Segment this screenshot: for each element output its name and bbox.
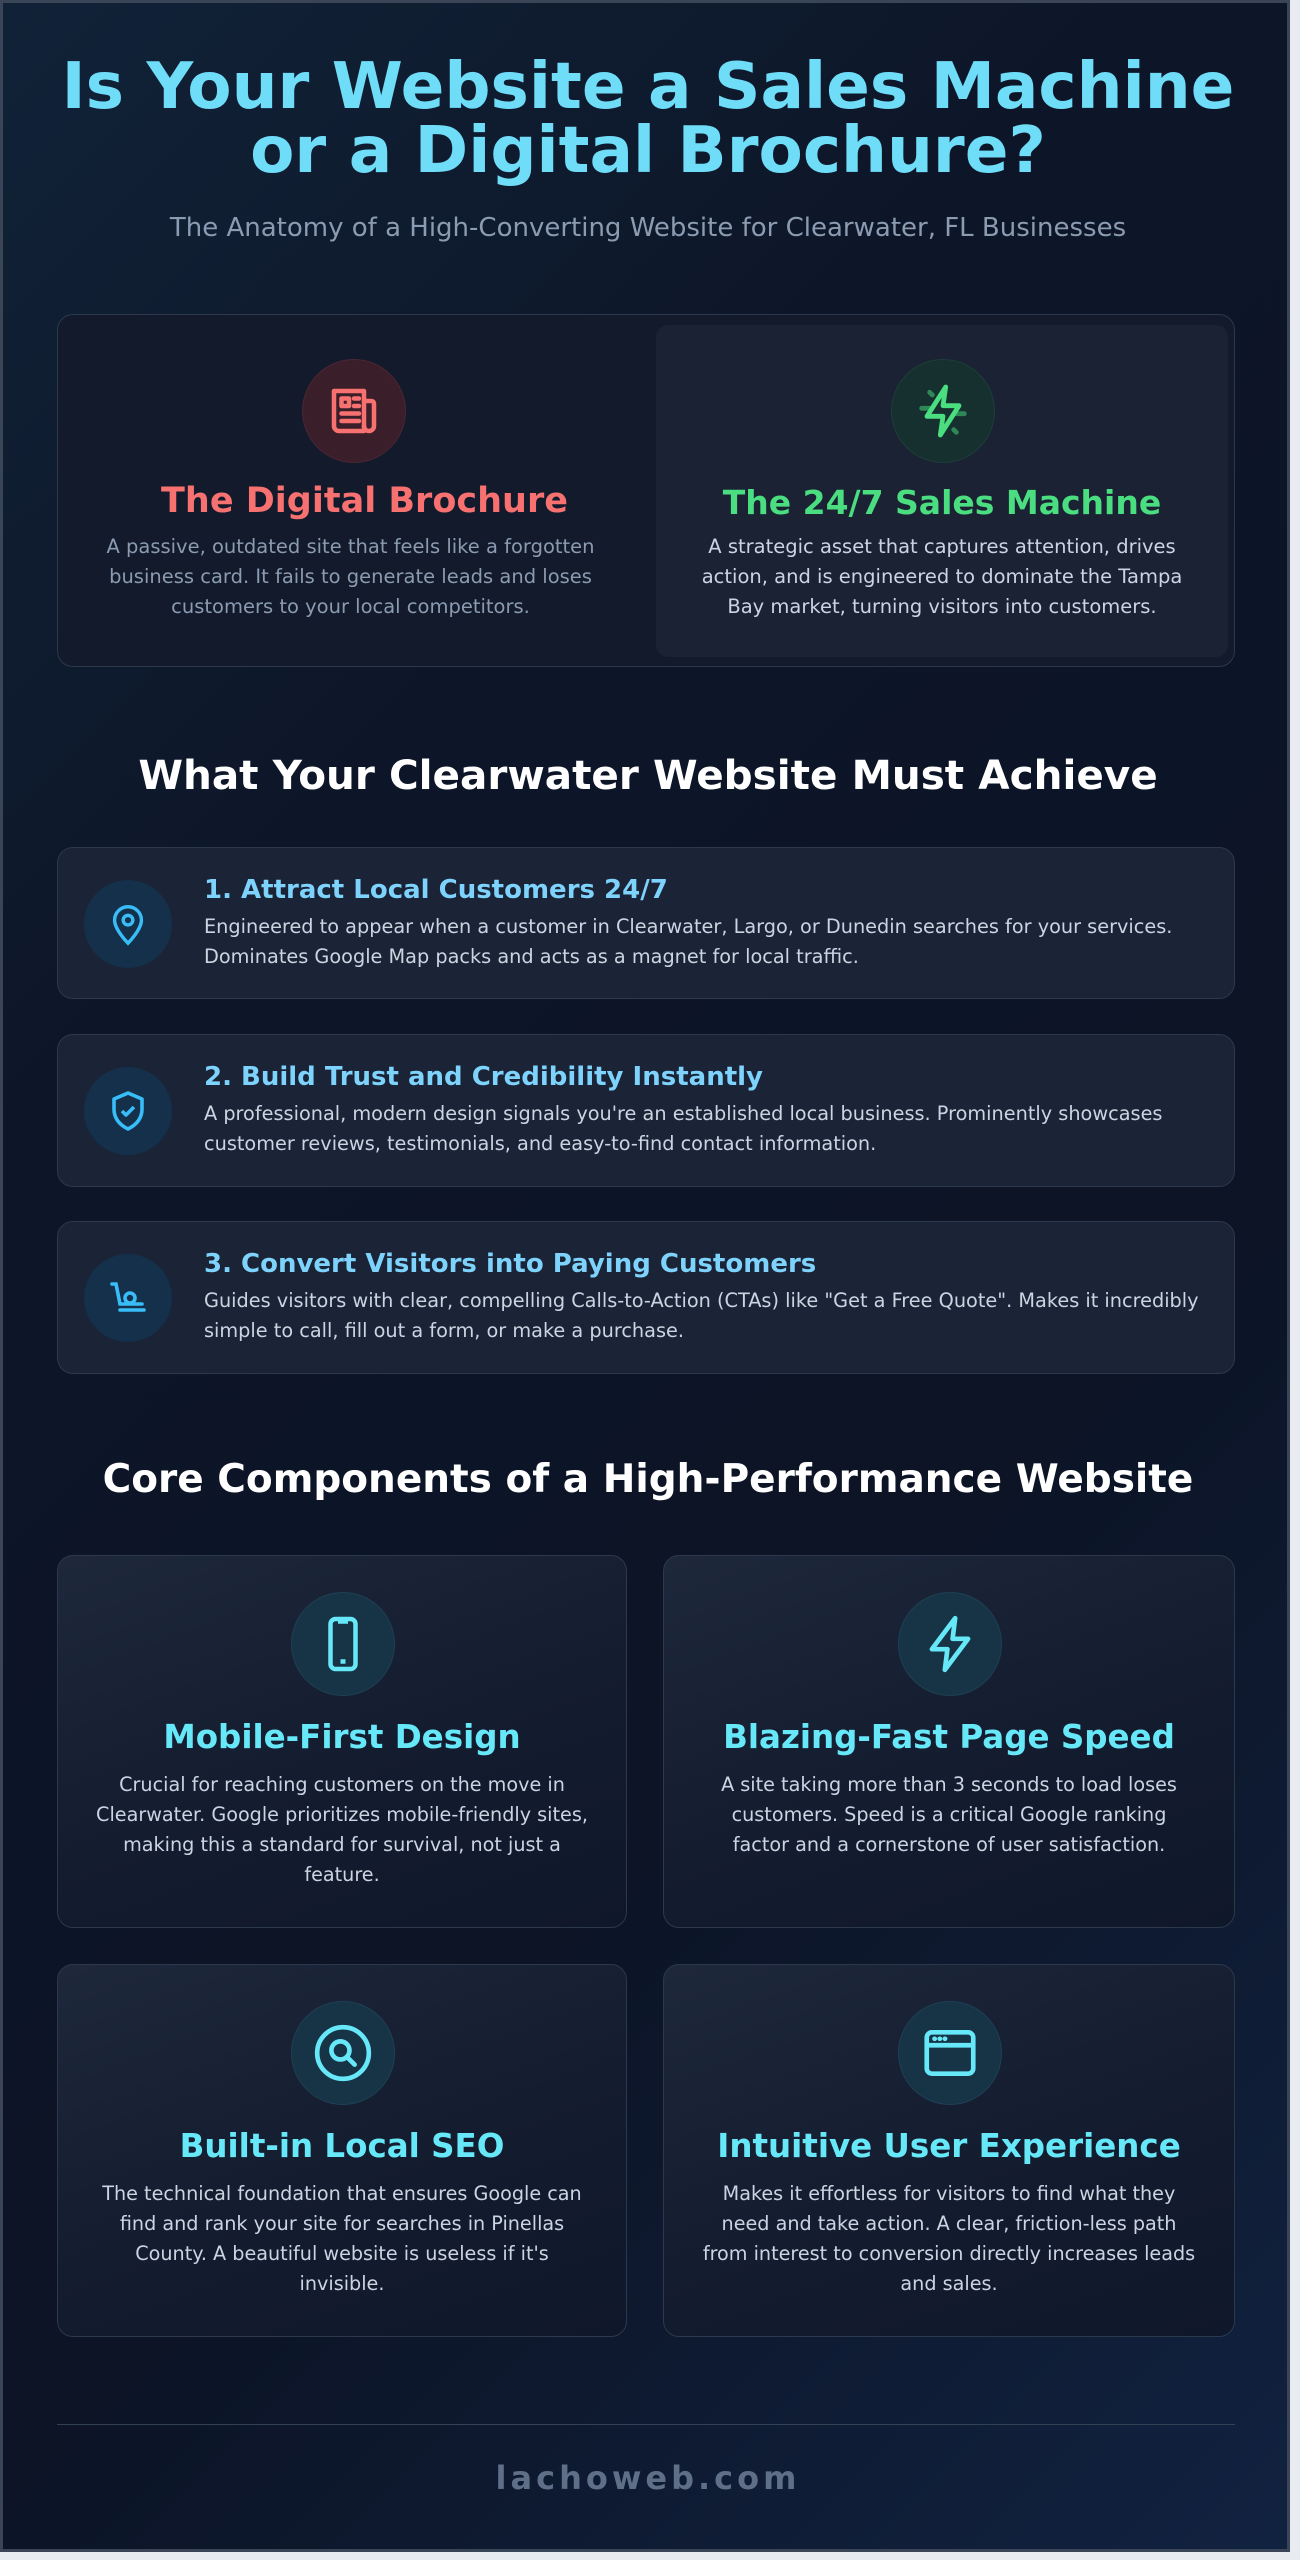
- icon: lightning: [891, 359, 995, 463]
- panel: comparison: [57, 314, 1235, 667]
- panel: fast speed: Blazing-Fast Page Speed: [723, 1718, 1175, 1756]
- panel: local seo: Built-in Local SEO: [180, 2127, 504, 2165]
- panel: digital brochure: [106, 359, 595, 618]
- heading: what your website must achieve: What Your Clearwater Website Must Achieve: [138, 751, 1158, 799]
- panel: mobile-first: [57, 1555, 627, 1928]
- panel: achieve 1: Engineered to appear when a customer in Clearwater, Largo, or Dunedin searches for your services. Dominates Google Map packs and acts as a magnet for local traffic.: [204, 915, 1172, 968]
- panel: mobile-first: Crucial for reaching customers on the move in Clearwater. Google prioritizes mobile-friendly sites, making this a standard for survival, not just a feature.: [96, 1773, 588, 1886]
- panel: achieve 3: Guides visitors with clear, compelling Calls-to-Action (CTAs) like "Get a Free Quote". Makes it incredibly simple to call, fill out a form, or make a purchase.: [204, 1289, 1199, 1342]
- text: sales machine description: A strategic asset that captures attention, drives action, and is engineered to dominate the Tampa Bay market, turning visitors into customers.: [702, 535, 1182, 618]
- title: [62, 49, 1234, 188]
- panel: user experience: [663, 1964, 1235, 2337]
- icon: map pin: [84, 880, 172, 968]
- icon: search: [291, 2001, 395, 2105]
- panel: mobile-first: Mobile-First Design: [163, 1718, 521, 1756]
- icon: newspaper: [302, 359, 406, 463]
- panel: achieve 3: [57, 1221, 1235, 1374]
- title: or a Digital Brochure?: [250, 113, 1046, 188]
- heading: core components: Core Components of a High-Performance Website: [103, 1457, 1193, 1502]
- panel: sales machine: [656, 325, 1228, 657]
- icon: cart: [84, 1254, 172, 1342]
- panel: user experience: Makes it effortless for visitors to find what they need and take action. A clear, friction-less path from interest to conversion directly increases leads and sales.: [703, 2182, 1195, 2295]
- panel: achieve 1: [57, 847, 1235, 999]
- panel: local seo: The technical foundation that ensures Google can find and rank your site for searches in Pinellas County. A beautiful website is useless if it's invisible.: [102, 2182, 582, 2295]
- panel: fast speed: A site taking more than 3 seconds to load loses customers. Speed is a critical Google ranking factor and a cornerstone of user satisfaction.: [721, 1773, 1177, 1856]
- icon: shield: [84, 1067, 172, 1155]
- panel: local seo: [57, 1964, 627, 2337]
- heading: the digital brochure: The Digital Brochure: [161, 481, 568, 521]
- panel: achieve 3: 3. Convert Visitors into Paying Customers: [204, 1249, 816, 1279]
- panel: user experience: Intuitive User Experience: [717, 2127, 1181, 2165]
- panel: fast speed: [663, 1555, 1235, 1928]
- panel: achieve 1: 1. Attract Local Customers 24/7: [204, 875, 668, 905]
- panel: achieve 2: [57, 1034, 1235, 1187]
- icon: browser window: [898, 2001, 1002, 2105]
- title: Is Your Website a Sales Machine: [62, 49, 1234, 124]
- icon: phone: [291, 1592, 395, 1696]
- icon: lightning: [898, 1592, 1002, 1696]
- text: brochure description: A passive, outdated site that feels like a forgotten business card. It fails to generate leads and loses customers to your local competitors.: [106, 535, 595, 618]
- footer: brand: lachoweb.com: [496, 2459, 800, 2497]
- subtitle: The Anatomy of a High-Converting Website for Clearwater, FL Businesses: [170, 213, 1126, 243]
- panel: achieve 2: 2. Build Trust and Credibility Instantly: [204, 1062, 763, 1092]
- heading: the 24/7 sales machine: The 24/7 Sales Machine: [723, 483, 1161, 522]
- panel: achieve 2: A professional, modern design signals you're an established local business. Prominently showcases customer reviews, testimonials, and easy-to-find contact information.: [204, 1102, 1162, 1155]
